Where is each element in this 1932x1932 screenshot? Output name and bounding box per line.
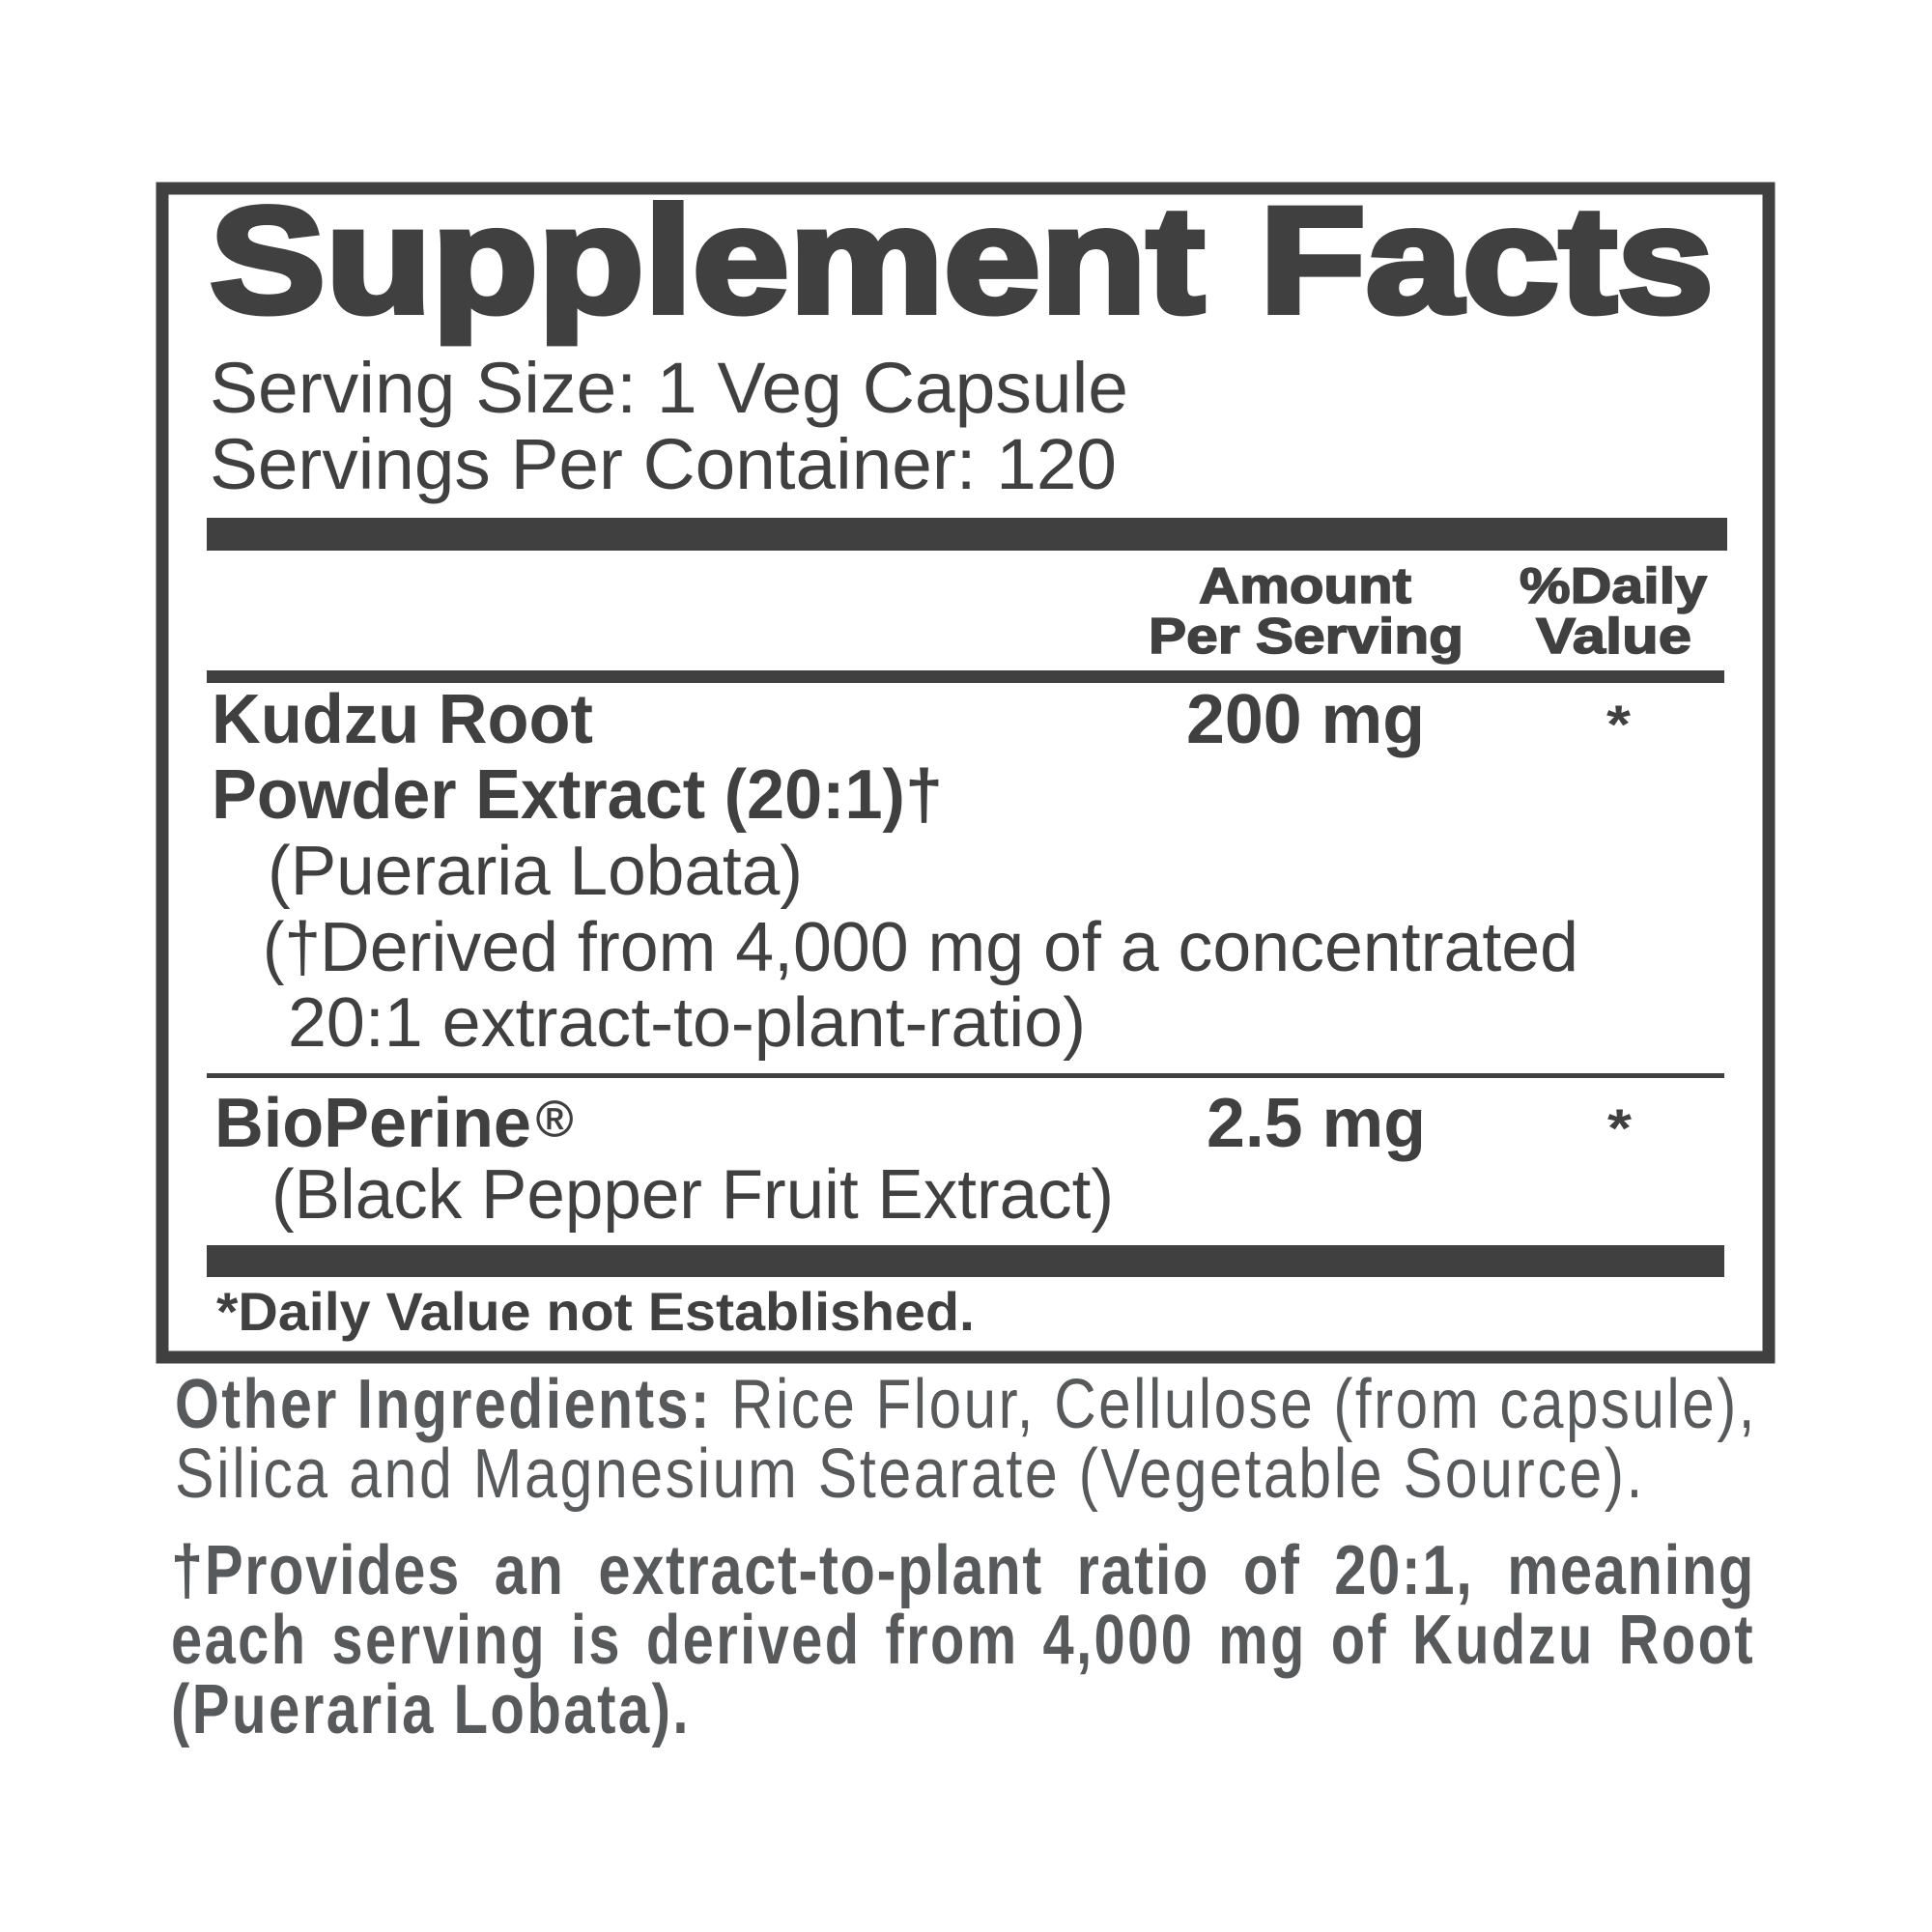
serving information: Servings Per Container: 120 [210, 424, 1117, 504]
ingredient: kudzu root: († [263, 909, 321, 986]
daily value: kudzu asterisk: * [1606, 694, 1631, 754]
panel: supplement facts box [162, 177, 1769, 1357]
other ingredients: Other Ingredients: [175, 1366, 712, 1443]
other ingredients: Silica and Magnesium Stearate (Vegetable Source). [175, 1435, 1645, 1513]
ingredient: bioperine: ® [536, 1092, 573, 1148]
column header: amount per serving: Amount [1199, 558, 1411, 614]
panel border [162, 188, 1769, 1357]
ingredient: kudzu root: Powder Extract (20:1)† [212, 756, 943, 834]
footnote: daily value: *Daily Value not Established. [216, 1281, 975, 1342]
ingredient: bioperine: (Black Pepper Fruit Extract) [271, 1156, 1114, 1234]
ingredient: kudzu root: (Pueraria Lobata) [268, 833, 803, 910]
serving information [210, 348, 1128, 504]
ingredient: kudzu root: Kudzu Root [212, 681, 593, 758]
column header: percent daily value: Value [1536, 609, 1691, 665]
ingredient: kudzu root: 20:1 extract-to-plant-ratio) [288, 984, 1086, 1062]
daily value: bioperine asterisk: * [1607, 1097, 1632, 1158]
amount: 2.5 mg: 2.5 mg [1207, 1085, 1426, 1162]
ingredient: kudzu root [212, 681, 1578, 1062]
extract ratio note [171, 1532, 1755, 1748]
amount: 200 mg: 200 mg [1186, 681, 1425, 758]
column header: percent daily value [1520, 558, 1707, 665]
other ingredients: Rice Flour, Cellulose (from capsule), [731, 1366, 1757, 1443]
other ingredients [175, 1366, 1757, 1513]
column header: percent daily value: %Daily [1520, 558, 1707, 614]
extract ratio note: (Pueraria Lobata). [171, 1671, 691, 1748]
column header: amount per serving [1149, 558, 1463, 665]
header divider [207, 670, 1724, 683]
ingredient: kudzu root: Derived from 4,000 mg of a concentrated [320, 909, 1578, 986]
column header: amount per serving: Per Serving [1149, 609, 1463, 665]
thick divider bottom [207, 1245, 1724, 1277]
thin divider [207, 1073, 1724, 1078]
ingredient: bioperine: BioPerine [214, 1085, 531, 1162]
ingredient: bioperine [214, 1085, 1114, 1234]
thick divider top [207, 518, 1727, 551]
title: Supplement Facts [210, 177, 1714, 345]
serving information: Serving Size: 1 Veg Capsule [210, 348, 1128, 428]
